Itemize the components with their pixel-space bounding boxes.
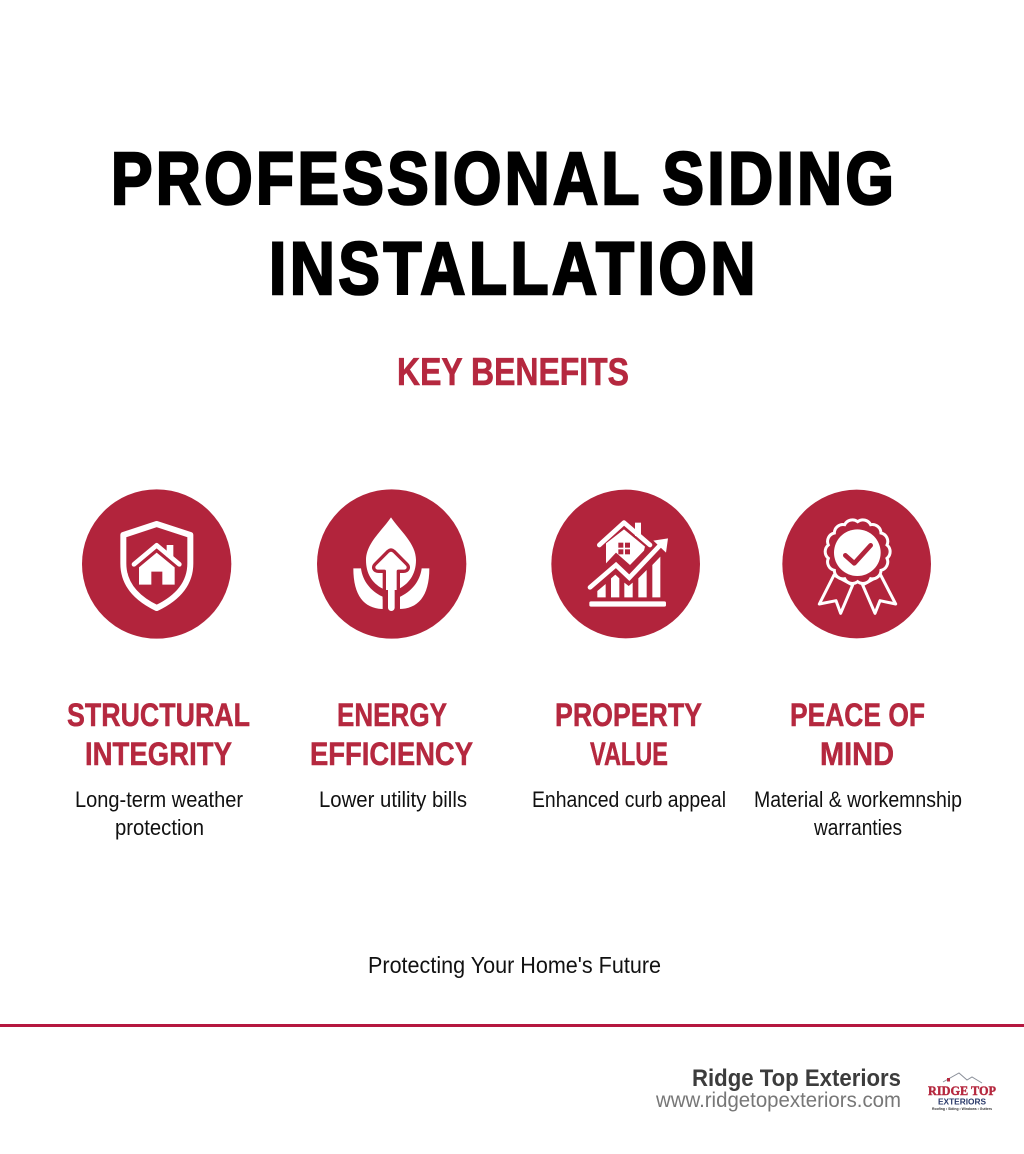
logo: ridge top exteriors: EXTERIORS xyxy=(938,1096,986,1106)
benefit: peace of mind: warranties xyxy=(813,815,902,840)
subtitle: key benefits: KEY BENEFITS xyxy=(397,351,629,394)
benefit: structural integrity: protection xyxy=(115,815,204,840)
benefit: peace of mind: MIND xyxy=(820,736,894,772)
benefit: property value: Enhanced curb appeal xyxy=(532,787,726,812)
benefit: structural integrity: STRUCTURAL xyxy=(67,697,250,733)
icon: drop with leaves and arrow xyxy=(317,489,466,639)
benefit: property value: PROPERTY xyxy=(555,697,702,733)
tagline: Protecting Your Home's Future xyxy=(368,952,661,978)
benefit: peace of mind: Material & workemnship xyxy=(754,787,962,812)
icon: award rosette with check xyxy=(782,490,931,638)
title: PROFESSIONAL SIDING xyxy=(111,138,894,220)
benefit: energy efficiency: Lower utility bills xyxy=(319,787,467,812)
logo: ridge top exteriors xyxy=(928,1073,996,1111)
logo: ridge top exteriors: Roofing • Siding • Windows • Gutters xyxy=(932,1106,993,1111)
footer company name: Ridge Top Exteriors xyxy=(692,1065,901,1092)
benefit: property value: VALUE xyxy=(590,736,668,772)
benefit: energy efficiency: ENERGY xyxy=(337,697,447,733)
benefit: structural integrity: Long-term weather xyxy=(75,787,243,812)
benefit: structural integrity: INTEGRITY xyxy=(85,736,232,772)
benefit: energy efficiency xyxy=(310,697,473,812)
title: INSTALLATION xyxy=(269,228,755,310)
benefit: property value xyxy=(532,697,726,812)
benefit: peace of mind: PEACE OF xyxy=(790,697,925,733)
footer website: www.ridgetopexteriors.com xyxy=(655,1089,901,1112)
logo: ridge top exteriors: RIDGE TOP xyxy=(928,1084,996,1098)
benefit: energy efficiency: EFFICIENCY xyxy=(310,736,473,772)
benefit: structural integrity xyxy=(67,697,250,840)
benefit: peace of mind xyxy=(754,697,962,840)
title xyxy=(111,138,894,310)
icon: shield with house xyxy=(82,489,231,639)
icon: house value chart xyxy=(551,490,700,638)
